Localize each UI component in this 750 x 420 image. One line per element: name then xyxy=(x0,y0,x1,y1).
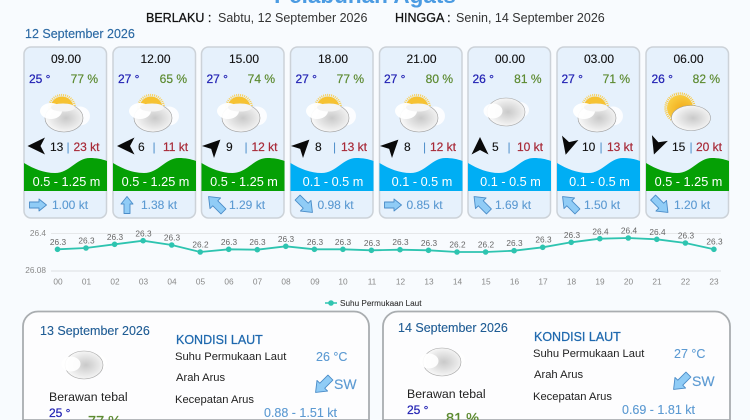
forecast card 15.00: 27 ° xyxy=(206,72,228,86)
line chart: sea surface temperature: 20 xyxy=(624,276,633,286)
forecast card 09.00 xyxy=(24,47,107,218)
line chart: sea surface temperature: 26.4 xyxy=(649,227,666,237)
panel: 13 September 2026: 26 °C xyxy=(316,350,347,364)
line chart: sea surface temperature: 26.3 xyxy=(50,237,66,247)
validity period: Sabtu, 12 September 2026 xyxy=(218,11,367,25)
forecast card 03.00: 13 kt xyxy=(607,140,634,154)
line chart: sea surface temperature: 11 xyxy=(368,276,377,286)
forecast card 00.00 xyxy=(468,47,551,218)
panel: 13 September 2026: Arah Arus xyxy=(176,372,226,384)
forecast card 18.00: 13 kt xyxy=(341,140,368,154)
line chart: sea surface temperature: 22 xyxy=(681,276,690,286)
forecast card 09.00: 77 % xyxy=(71,72,98,86)
forecast card 18.00 xyxy=(290,47,374,218)
forecast card 09.00: | xyxy=(66,140,70,154)
line chart: sea surface temperature: 26.4 xyxy=(621,226,637,236)
line chart: sea surface temperature: 17 xyxy=(538,276,548,286)
validity period xyxy=(146,11,605,25)
panel: 14 September 2026: Kecepatan Arus xyxy=(533,391,612,403)
line chart: sea surface temperature: 12 xyxy=(396,276,405,286)
forecast card 21.00: 12 kt xyxy=(430,140,457,154)
line chart: sea surface temperature: 26.3 xyxy=(278,234,294,244)
forecast card 15.00: 15.00 xyxy=(229,52,259,66)
forecast card 18.00: 77 % xyxy=(337,72,364,86)
line chart: sea surface temperature: 10 xyxy=(338,276,348,286)
line chart: sea surface temperature: 26.3 xyxy=(221,237,237,247)
forecast card 15.00: 0.5 - 1.25 m xyxy=(210,175,278,189)
forecast card 00.00: 81 % xyxy=(514,72,542,86)
forecast card 15.00 xyxy=(202,47,284,218)
forecast card 00.00: 10 kt xyxy=(517,140,544,154)
line chart: sea surface temperature: 07 xyxy=(253,276,262,286)
line chart: sea surface temperature: 16 xyxy=(510,276,519,286)
forecast card 00.00: 00.00 xyxy=(495,52,525,66)
forecast card 18.00: 18.00 xyxy=(318,52,348,66)
line chart: sea surface temperature: 26.3 xyxy=(364,238,380,248)
panel: 13 September 2026 xyxy=(23,312,369,420)
chart legend: Suhu Permukaan Laut xyxy=(340,299,422,308)
forecast card 06.00: 0.5 - 1.25 m xyxy=(655,175,722,189)
forecast card 21.00: 80 % xyxy=(426,72,453,86)
forecast card 00.00: 0.1 - 0.5 m xyxy=(480,175,541,189)
forecast card 21.00: 0.85 kt xyxy=(406,198,443,212)
line chart: sea surface temperature: 26.3 xyxy=(535,234,552,244)
forecast card 21.00: 21.00 xyxy=(406,52,437,66)
line chart: sea surface temperature: 26.3 xyxy=(164,232,180,242)
forecast card 06.00: 15 xyxy=(672,140,686,154)
forecast card 03.00: 27 ° xyxy=(562,72,583,86)
forecast card 12.00: | xyxy=(152,140,156,154)
line chart: sea surface temperature: 15 xyxy=(481,276,491,286)
forecast card 06.00: 1.20 kt xyxy=(674,198,711,212)
icon: sun behind cloud xyxy=(666,94,710,130)
forecast card 18.00: 0.1 - 0.5 m xyxy=(303,175,363,189)
panel: 14 September 2026: Berawan tebal xyxy=(407,387,486,401)
forecast card 21.00: 8 xyxy=(404,140,411,154)
panel: 14 September 2026: KONDISI LAUT xyxy=(534,330,621,344)
validity period: Senin, 14 September 2026 xyxy=(456,11,605,25)
line chart: sea surface temperature: 03 xyxy=(139,276,148,286)
forecast card 12.00: 12.00 xyxy=(140,52,171,66)
validity period: BERLAKU : xyxy=(146,11,211,25)
forecast card 06.00: 06.00 xyxy=(673,52,704,66)
line chart: sea surface temperature: 08 xyxy=(281,276,291,286)
forecast card 03.00: | xyxy=(600,140,603,154)
line chart: sea surface temperature: 26.3 xyxy=(107,232,123,242)
forecast card 03.00 xyxy=(557,47,640,218)
panel: 13 September 2026: Berawan tebal xyxy=(49,390,128,404)
forecast card 21.00: 27 ° xyxy=(384,72,406,86)
forecast card 15.00: 12 kt xyxy=(252,140,278,154)
panel: 13 September 2026: 13 September 2026 xyxy=(40,324,150,338)
forecast card 09.00: 09.00 xyxy=(51,52,81,66)
forecast card 06.00: 20 kt xyxy=(696,140,723,154)
forecast card 15.00: 1.29 kt xyxy=(229,198,266,212)
forecast card 12.00 xyxy=(113,47,196,218)
forecast card 12.00: 0.5 - 1.25 m xyxy=(122,175,189,189)
line chart: sea surface temperature: 23 xyxy=(709,276,719,286)
forecast card 06.00 xyxy=(646,47,729,218)
forecast card 15.00: 9 xyxy=(226,140,233,154)
forecast card 00.00: 26 ° xyxy=(472,72,494,86)
panel: 13 September 2026: SW xyxy=(334,376,357,392)
panel: 13 September 2026: 0.88 - 1.51 kt xyxy=(264,406,337,420)
line chart: sea surface temperature: 26.2 xyxy=(192,240,209,250)
line chart: sea surface temperature: 26.3 xyxy=(307,237,323,247)
panel: 13 September 2026: Suhu Permukaan Laut xyxy=(175,351,287,363)
forecast card 18.00: | xyxy=(333,140,336,154)
line chart: sea surface temperature xyxy=(25,226,723,286)
line chart: sea surface temperature: 19 xyxy=(595,276,605,286)
line chart: sea surface temperature: 26.2 xyxy=(449,240,466,250)
forecast card 21.00 xyxy=(380,47,462,218)
panel: 14 September 2026: 0.69 - 1.81 kt xyxy=(622,403,695,417)
forecast card 06.00: | xyxy=(690,140,693,154)
line chart: sea surface temperature: 26.3 xyxy=(678,230,694,240)
panel: 14 September 2026: Suhu Permukaan Laut xyxy=(533,348,645,360)
line chart: sea surface temperature: 26.3 xyxy=(135,228,152,238)
line chart: sea surface temperature: 01 xyxy=(82,276,91,286)
line chart: sea surface temperature: 26.3 xyxy=(564,230,580,240)
line chart: sea surface temperature: 09 xyxy=(310,276,320,286)
forecast card 21.00: 0.1 - 0.5 m xyxy=(392,175,452,189)
line chart: sea surface temperature: 21 xyxy=(652,276,662,286)
forecast card 12.00: 1.38 kt xyxy=(141,198,178,212)
forecast card 09.00: 1.00 kt xyxy=(52,198,89,212)
line chart: sea surface temperature: 26.3 xyxy=(78,236,95,246)
line chart: sea surface temperature: 02 xyxy=(110,276,120,286)
panel: 14 September 2026: 25 ° xyxy=(407,403,429,417)
forecast card 09.00: 0.5 - 1.25 m xyxy=(33,175,100,189)
line chart: sea surface temperature: 14 xyxy=(453,276,462,286)
forecast card 00.00: 1.69 kt xyxy=(495,198,532,212)
forecast card 03.00: 1.50 kt xyxy=(584,198,621,212)
line chart: sea surface temperature: 26.08 xyxy=(25,265,46,275)
forecast card 09.00: 13 xyxy=(50,140,64,154)
forecast card 15.00: 74 % xyxy=(248,72,275,86)
panel: 14 September 2026: SW xyxy=(692,373,715,389)
line chart: sea surface temperature: 26.2 xyxy=(478,240,494,250)
line chart: sea surface temperature: 26.3 xyxy=(421,238,437,248)
forecast card 09.00: 23 kt xyxy=(74,140,100,154)
line chart: sea surface temperature: 13 xyxy=(424,276,434,286)
line chart: sea surface temperature: 04 xyxy=(167,276,177,286)
line chart: sea surface temperature: 00 xyxy=(53,276,63,286)
forecast card 03.00: 10 xyxy=(582,140,596,154)
forecast card 18.00: 27 ° xyxy=(296,72,317,86)
forecast card 21.00: | xyxy=(423,140,426,154)
forecast card 12.00: 11 kt xyxy=(163,140,189,154)
line chart: sea surface temperature: 18 xyxy=(567,276,576,286)
panel: 14 September 2026 xyxy=(383,312,730,420)
forecast card 15.00: | xyxy=(244,140,248,154)
line chart: sea surface temperature: 26.4 xyxy=(592,226,609,236)
panel: 14 September 2026: 14 September 2026 xyxy=(398,321,508,335)
forecast card 03.00: 71 % xyxy=(603,72,630,86)
line chart: sea surface temperature: 26.3 xyxy=(392,237,409,247)
validity period: HINGGA : xyxy=(395,11,451,25)
line chart: sea surface temperature: 26.3 xyxy=(506,238,523,248)
line chart: sea surface temperature: 26.3 xyxy=(335,237,351,247)
forecast card 12.00: 6 xyxy=(138,140,145,154)
panel: 13 September 2026: Kecepatan Arus xyxy=(175,394,254,406)
panel: 14 September 2026: Arah Arus xyxy=(534,369,584,381)
forecast card 12.00: 27 ° xyxy=(118,72,140,86)
date heading: 12 September 2026: 12 September 2026 xyxy=(25,27,135,41)
forecast card 06.00: 82 % xyxy=(693,72,720,86)
forecast card 00.00: 5 xyxy=(492,140,499,154)
forecast card 12.00: 65 % xyxy=(160,72,187,86)
line chart: sea surface temperature: 05 xyxy=(196,276,205,286)
panel: 14 September 2026: 27 °C xyxy=(674,347,705,361)
line chart: sea surface temperature: 26.4 xyxy=(30,228,46,238)
forecast card 00.00: | xyxy=(508,140,511,154)
forecast card 06.00: 26 ° xyxy=(652,72,673,86)
line chart: sea surface temperature: 26.3 xyxy=(706,236,723,246)
forecast card 03.00: 0.1 - 0.5 m xyxy=(569,175,630,189)
forecast card 18.00: 0.98 kt xyxy=(318,198,354,212)
forecast card 18.00: 8 xyxy=(315,140,322,154)
panel: 13 September 2026: KONDISI LAUT xyxy=(176,333,263,347)
line chart: sea surface temperature: 06 xyxy=(224,276,234,286)
panel: 13 September 2026: 25 ° xyxy=(49,406,71,420)
forecast card 09.00: 25 ° xyxy=(29,72,51,86)
line chart: sea surface temperature: 26.3 xyxy=(249,237,266,247)
forecast card 03.00: 03.00 xyxy=(584,52,614,66)
